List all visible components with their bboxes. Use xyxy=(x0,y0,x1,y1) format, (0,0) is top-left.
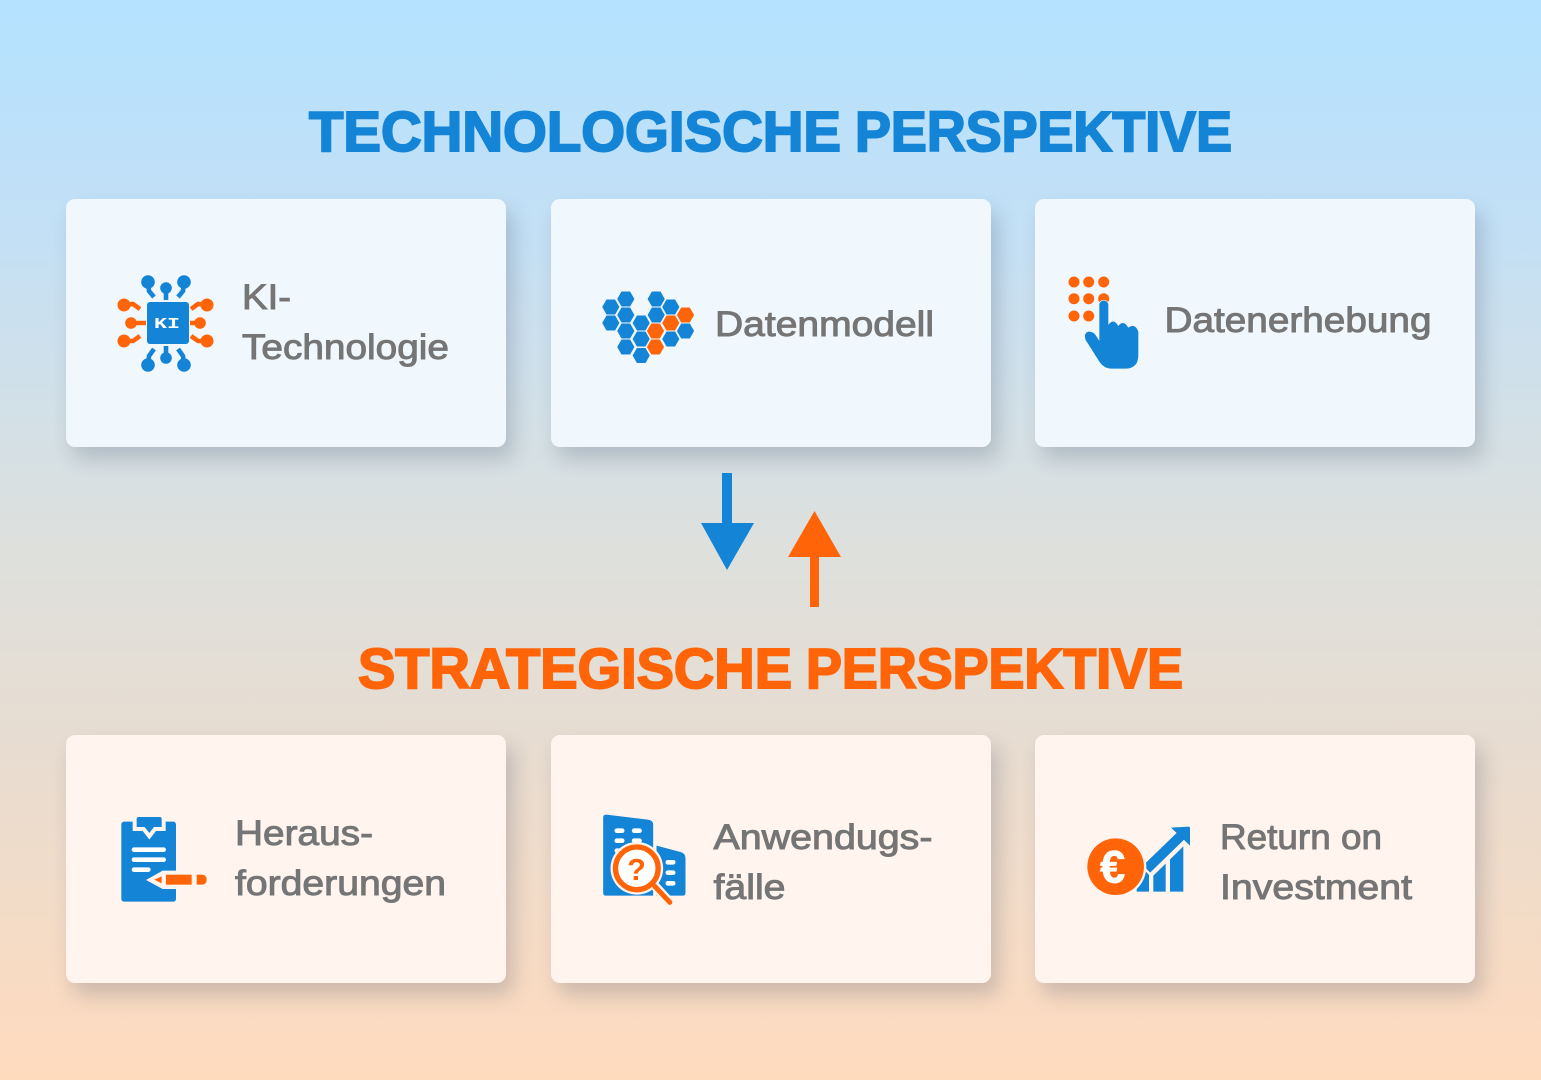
label: Herausforderungen: forderungen xyxy=(235,864,446,903)
panel: Datenmodell xyxy=(550,199,990,447)
arrow: up, orange xyxy=(788,511,841,607)
arrow: down, blue xyxy=(701,473,754,570)
icon: KI chip xyxy=(118,275,214,372)
icon: buildings with magnifier: ? xyxy=(627,853,645,887)
heading: strategische Perspektive: STRATEGISCHE xyxy=(358,637,792,701)
label: Return on Investment: Return on xyxy=(1220,818,1382,857)
icon: euro coin with rising chart: € xyxy=(1100,842,1125,893)
icon: honeycomb xyxy=(602,292,694,363)
label: Datenerhebung: Datenerhebung xyxy=(1164,301,1432,340)
panel: Herausforderungen xyxy=(66,735,506,983)
label: Anwendungsfälle: Anwendugs- xyxy=(713,818,932,857)
icon: euro coin with rising chart xyxy=(1085,827,1190,897)
label: Anwendungsfälle: fälle xyxy=(713,868,785,907)
panel: Anwendungsfälle xyxy=(550,735,990,983)
icon: clipboard with pencil xyxy=(121,817,210,902)
label: KI-Technologie: KI- xyxy=(242,278,291,317)
heading: strategische Perspektive: PERSPEKTIVE xyxy=(806,637,1183,701)
heading: technologische Perspektive: TECHNOLOGISCHE xyxy=(309,100,841,164)
label: Anwendungsfälle xyxy=(713,818,932,907)
label: Datenmodell: Datenmodell xyxy=(714,305,934,344)
panel: KI-Technologie xyxy=(66,199,506,447)
heading: technologische Perspektive xyxy=(308,100,1232,164)
label: Return on Investment: Investment xyxy=(1220,868,1412,907)
heading: strategische Perspektive xyxy=(358,637,1183,701)
label: Herausforderungen xyxy=(235,814,446,903)
label: Herausforderungen: Heraus- xyxy=(235,814,373,853)
label: KI-Technologie: Technologie xyxy=(242,328,449,367)
label: Return on Investment xyxy=(1220,818,1412,907)
icon: hand on keypad xyxy=(1068,276,1138,369)
icon: KI chip: KI xyxy=(154,316,180,333)
panel: Return on Investment xyxy=(1035,735,1475,983)
panel: Datenerhebung xyxy=(1035,199,1475,447)
icon: buildings with magnifier xyxy=(603,815,685,902)
label: KI-Technologie xyxy=(242,278,449,367)
heading: technologische Perspektive: PERSPEKTIVE xyxy=(855,100,1232,164)
